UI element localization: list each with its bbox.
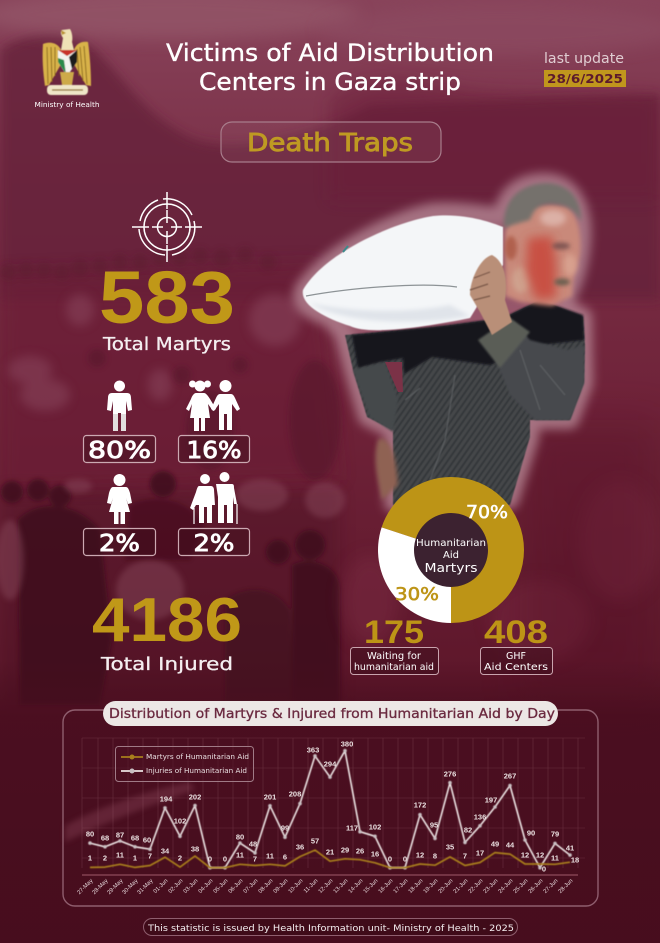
donut chart: Humanitarian [416, 538, 486, 549]
injuries value labels: 202 [189, 792, 201, 802]
jacket [345, 300, 585, 505]
date axis labels: 12-Jun [318, 878, 334, 895]
photo: man carrying aid sack [302, 182, 585, 505]
donut chart [378, 477, 524, 623]
icon: elderly couple [190, 472, 237, 524]
chart title [103, 701, 558, 726]
martyrs value labels: 1 [88, 854, 92, 862]
injuries value labels: 68 [131, 834, 139, 842]
date axis labels: 09-Jun [273, 878, 289, 895]
icon: woman [107, 474, 132, 524]
martyrs value labels: 7 [253, 854, 257, 864]
stat: men 80%: 80% [88, 438, 151, 464]
stat: total injured: 4186 [92, 586, 242, 655]
injuries value labels: 136 [474, 812, 486, 822]
date axis labels: 19-Jun [423, 878, 439, 895]
date axis labels: 16-Jun [378, 878, 394, 895]
martyrs value labels: 34 [161, 846, 170, 856]
injuries value labels: 0 [403, 854, 407, 864]
date axis labels: 14-Jun [348, 878, 364, 895]
stat: elderly 2%: 2% [194, 531, 234, 557]
martyrs value labels: 12 [416, 850, 424, 860]
martyrs value labels: 35 [446, 842, 454, 852]
stat: GHF aid centers [480, 614, 552, 674]
last update: last update [544, 51, 624, 67]
injuries value labels: 80 [86, 830, 94, 838]
panel: daily distribution chart [63, 701, 598, 906]
injuries value labels: 82 [464, 826, 472, 834]
date axis labels: 27-Jun [543, 878, 559, 895]
chart legend [116, 746, 254, 782]
martyrs value labels: 12 [536, 850, 544, 860]
footer source note [144, 918, 518, 936]
injuries value labels: 0 [388, 854, 392, 864]
right side tonal patches [342, 480, 660, 660]
martyrs value labels: 36 [296, 842, 304, 852]
date axis labels [76, 878, 574, 896]
left wing [43, 43, 61, 86]
chart legend: Injuries of Humanitarian Aid [146, 767, 247, 775]
lower crowd silhouettes [0, 490, 340, 705]
stat: GHF aid centers: Aid Centers [484, 662, 548, 673]
hair [504, 183, 581, 228]
date axis labels: 28-Jun [558, 878, 574, 895]
date axis labels: 31-May [136, 878, 154, 896]
donut chart: Aid [443, 550, 459, 561]
injuries value labels: 172 [414, 800, 426, 810]
injuries value labels: 0 [223, 854, 227, 864]
date axis labels: 01-Jun [153, 878, 169, 895]
last update: 28/6/2025 [547, 72, 623, 86]
donut chart: 70% [466, 502, 508, 523]
stat: GHF aid centers: GHF [506, 651, 526, 662]
date axis labels: 27-May [76, 878, 94, 896]
chart legend: Martyrs of Humanitarian Aid [146, 753, 249, 761]
injuries value labels: 68 [101, 834, 109, 842]
stat: women 2% [84, 528, 156, 557]
shield [58, 50, 77, 76]
date axis labels: 10-Jun [288, 878, 304, 895]
martyrs value labels: 38 [191, 844, 199, 854]
martyrs value labels [88, 836, 579, 864]
martyrs value labels: 2 [103, 854, 107, 862]
neck and head [61, 29, 74, 50]
date axis labels: 15-Jun [363, 878, 379, 895]
heading: death traps [221, 122, 441, 162]
date axis labels: 08-Jun [258, 878, 274, 895]
date axis labels: 21-Jun [453, 878, 469, 895]
date axis labels: 13-Jun [333, 878, 349, 895]
scroll base [47, 85, 88, 95]
injuries value labels: 294 [324, 760, 337, 768]
injuries value labels: 87 [116, 830, 124, 840]
date axis labels: 23-Jun [483, 878, 499, 895]
sack [303, 215, 503, 330]
stat: children 16% [178, 436, 250, 464]
date axis labels: 17-Jun [393, 878, 409, 895]
icon: man [107, 380, 132, 431]
martyrs value labels: 11 [116, 850, 124, 860]
grid lines [82, 738, 585, 868]
martyrs value labels: 12 [521, 850, 529, 860]
tail [60, 72, 74, 85]
martyrs value labels: 29 [341, 846, 349, 854]
date axis labels: 02-Jun [168, 878, 184, 895]
date axis labels: 20-Jun [438, 878, 454, 895]
halo around figure [302, 182, 584, 503]
icon: ministry emblem: Ministry of Health [34, 101, 100, 109]
martyrs value labels: 57 [311, 836, 319, 846]
date axis labels: 06-Jun [228, 878, 244, 895]
martyrs value labels: 49 [491, 840, 499, 848]
injuries value labels: 0 [208, 854, 212, 864]
moustache [554, 278, 570, 286]
date axis labels: 25-Jun [513, 878, 529, 895]
injuries value labels: 90 [527, 828, 535, 838]
injuries line [88, 749, 572, 870]
injuries value labels: 380 [341, 740, 353, 748]
injuries value labels: 95 [430, 820, 438, 830]
hand [470, 255, 512, 335]
date axis labels: 03-Jun [183, 878, 199, 895]
date axis labels: 28-May [91, 878, 109, 896]
injuries value labels: 363 [307, 746, 319, 754]
martyrs value labels: 2 [178, 854, 182, 862]
icon: children [186, 380, 240, 431]
upper crowd mass [0, 262, 340, 490]
stat: waiting for humanitarian aid: Waiting for [367, 651, 421, 662]
injuries value labels: 208 [289, 790, 301, 798]
injuries value labels: 60 [143, 836, 151, 844]
date axis labels: 30-May [121, 878, 139, 896]
title: Centers in Gaza strip [199, 68, 461, 96]
date axis labels: 29-May [106, 878, 124, 896]
martyrs value labels: 16 [371, 850, 379, 858]
neck and face [505, 204, 580, 306]
footer source note: This statistic is issued by Health Information unit- Ministry of Health - 2025 [147, 924, 514, 934]
stat: total injured: Total Injured [100, 654, 233, 675]
martyrs value labels: 8 [433, 852, 437, 860]
martyrs value labels: 18 [571, 856, 579, 864]
stat: waiting for humanitarian aid: 175 [364, 614, 424, 650]
forearm sleeve [478, 318, 530, 368]
injuries value labels: 201 [264, 792, 276, 802]
martyrs value labels: 6 [283, 852, 287, 862]
date axis labels: 04-Jun [198, 878, 214, 895]
date axis labels: 24-Jun [498, 878, 514, 895]
injuries value labels: 0 [542, 864, 546, 874]
stat: GHF aid centers: 408 [484, 614, 548, 650]
martyrs value labels: 11 [551, 854, 559, 862]
stat: elderly 2% [178, 528, 250, 557]
icon: target [132, 192, 202, 262]
injuries value labels: 102 [174, 816, 186, 826]
stat: children 16%: 16% [186, 438, 242, 464]
title: Victims of Aid Distribution [166, 39, 494, 67]
title [166, 39, 494, 96]
lower hand [375, 439, 398, 500]
martyrs value labels: 26 [356, 846, 364, 856]
right wing [74, 42, 91, 86]
stat: women 2%: 2% [99, 531, 140, 557]
martyrs value labels: 17 [476, 848, 484, 858]
eye [552, 242, 570, 250]
stat: total martyrs: 583 [99, 256, 235, 339]
date axis labels: 11-Jun [303, 878, 319, 895]
martyrs value labels: 1 [133, 854, 137, 862]
martyrs value labels: 44 [506, 840, 515, 850]
last update [544, 51, 626, 87]
martyrs line [90, 850, 570, 868]
stat: waiting for humanitarian aid: humanitarian aid [354, 662, 434, 673]
martyrs value labels: 7 [148, 852, 152, 860]
heading: death traps: Death Traps [247, 128, 413, 157]
injuries value labels: 276 [444, 770, 456, 778]
injuries value labels: 102 [369, 822, 381, 832]
martyrs value labels: 11 [266, 852, 274, 860]
injuries value labels: 79 [551, 830, 559, 838]
chart title: Distribution of Martyrs & Injured from Humanitarian Aid by Day [109, 707, 555, 722]
injuries value labels: 197 [485, 796, 497, 804]
injuries value labels: 117 [346, 824, 358, 832]
date axis labels: 18-Jun [408, 878, 424, 895]
donut chart: Martyrs [424, 560, 478, 575]
injuries value labels: 41 [566, 844, 574, 852]
stat: waiting for humanitarian aid [350, 614, 438, 674]
injuries value labels: 99 [281, 824, 289, 832]
injuries value labels: 48 [249, 840, 257, 848]
date axis labels: 26-Jun [528, 878, 544, 895]
martyrs value labels: 21 [326, 848, 334, 856]
background crowd photo [0, 247, 660, 943]
injuries value labels: 267 [504, 772, 516, 780]
stat: men 80% [84, 436, 156, 464]
martyrs value labels: 11 [236, 850, 244, 860]
martyrs value labels: 7 [463, 852, 467, 860]
injuries value labels: 80 [236, 832, 244, 842]
injuries value labels: 194 [160, 794, 173, 804]
icon: ministry emblem [34, 29, 100, 109]
stat: total martyrs: Total Martyrs [102, 334, 231, 355]
date axis labels: 07-Jun [243, 878, 259, 895]
date axis labels: 22-Jun [468, 878, 484, 895]
date axis labels: 05-Jun [213, 878, 229, 895]
injuries value labels [86, 740, 574, 874]
donut chart: 30% [395, 584, 439, 605]
